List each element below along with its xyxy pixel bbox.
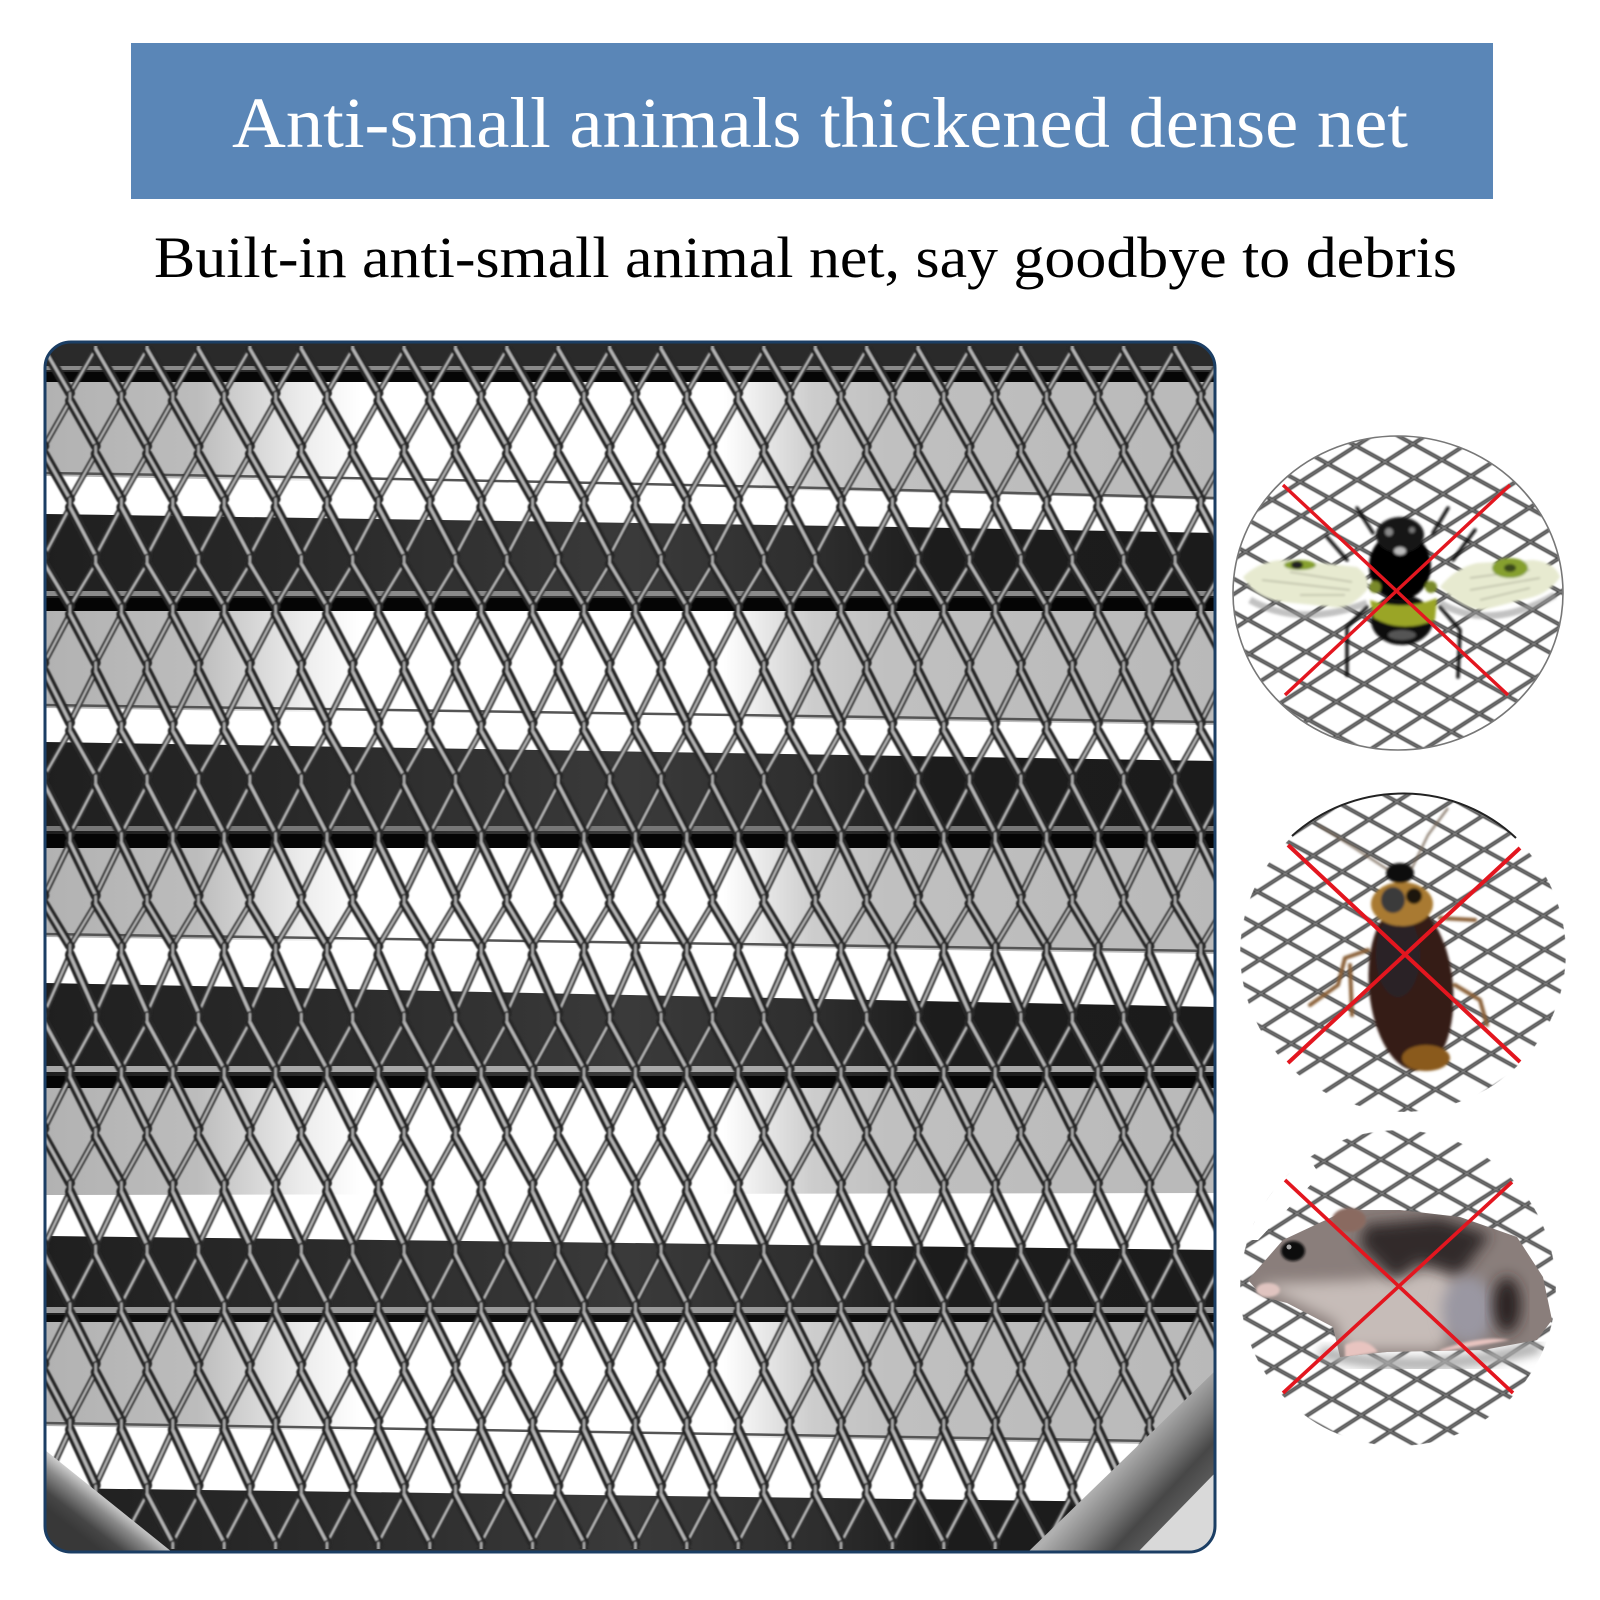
panel border — [45, 342, 1215, 1552]
icon: fly — [1243, 508, 1560, 677]
title: Anti-small animals thickened dense net — [232, 83, 1408, 163]
red cross — [1283, 1180, 1513, 1393]
circle: hamster blocked by net — [1235, 1130, 1560, 1446]
stripe band 2 — [45, 705, 1215, 848]
panel: close-up of metal net — [44, 340, 1216, 1554]
icon: cockroach — [1310, 808, 1487, 1074]
white mask near hamster top left — [1251, 1165, 1316, 1240]
circle top edge — [1292, 794, 1516, 838]
title banner — [131, 43, 1493, 199]
red cross — [1288, 845, 1520, 1063]
red cross — [1283, 485, 1510, 695]
stripe band 3 — [45, 934, 1215, 1088]
subtitle: Built-in anti-small animal net, say goodbye to debris — [154, 225, 1457, 290]
circle: cockroach blocked by net — [1240, 794, 1566, 1112]
stripe band 5 — [45, 1423, 1215, 1552]
curled corner bottom right — [1028, 1371, 1215, 1552]
circle outline — [1233, 436, 1563, 750]
stripe band 1 — [45, 473, 1215, 611]
curled corner bottom left — [45, 1450, 172, 1552]
icon: hamster — [1240, 1200, 1560, 1365]
diamond wire mesh — [46, 346, 1214, 1549]
circle: fly blocked by net — [1233, 436, 1563, 750]
top dark edge — [45, 342, 1215, 382]
stripe band 4 — [45, 1193, 1215, 1322]
